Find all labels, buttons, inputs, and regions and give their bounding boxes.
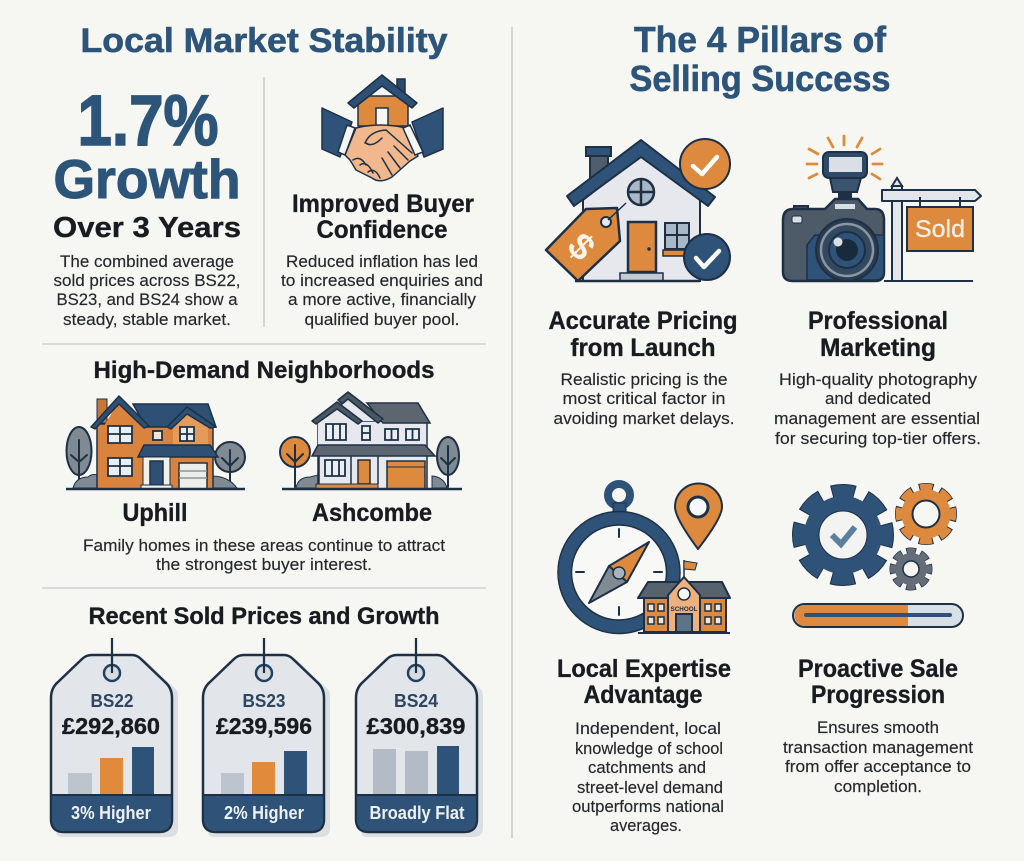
- text: combined average description: steady, stable market.: [63, 310, 231, 329]
- heading: Accurate Pricing from Launch: from Launch: [570, 334, 716, 362]
- text: high-quality photography description: management are essential: [774, 409, 980, 428]
- price tag: BS22: 3% Higher: [71, 803, 151, 823]
- panel: high-demand neighborhoods: [66, 357, 462, 574]
- text: independent local knowledge description: catchments and: [588, 758, 706, 777]
- text: independent local knowledge description: outperforms national: [572, 797, 724, 816]
- heading: High-Demand Neighborhoods: High-Demand Neighborhoods: [94, 357, 434, 384]
- icon: camera with flash and sold sign: [783, 136, 981, 281]
- price tag: BS23: BS23: [242, 691, 286, 711]
- heading: Local Expertise Advantage: Advantage: [584, 681, 703, 709]
- heading: Local Market Stability: Local Market Stability: [80, 22, 448, 60]
- heading: Proactive Sale Progression: [798, 655, 958, 709]
- heading: Improved Buyer Confidence: Confidence: [316, 216, 448, 244]
- heading: Improved Buyer Confidence: Improved Buyer: [292, 190, 474, 218]
- panel: the 4 pillars of selling success: [546, 19, 981, 835]
- price tag: BS24: BS24: [394, 691, 438, 711]
- text: ensures smooth transaction description: [783, 718, 973, 796]
- text: reduced inflation description: Reduced inflation has led: [286, 252, 478, 271]
- text: independent local knowledge description: knowledge of school: [575, 739, 723, 758]
- text: realistic pricing description: Realistic pricing is the: [560, 370, 728, 389]
- stat: 1.7% growth over 3 years: Over 3 Years: [53, 212, 241, 244]
- text: ensures smooth transaction description: transaction management: [783, 738, 973, 757]
- heading: Improved Buyer Confidence: [292, 190, 474, 244]
- text: combined average description: sold prices across BS22,: [54, 271, 240, 290]
- icon: camera with flash and sold sign: Sold: [915, 216, 965, 243]
- price tag: BS24: Broadly Flat: [370, 803, 464, 823]
- text: independent local knowledge description: Independent, local: [575, 719, 721, 738]
- text: reduced inflation description: to increased enquiries and: [281, 271, 483, 290]
- heading: The 4 Pillars of Selling Success: Selling Success: [630, 58, 890, 99]
- text: realistic pricing description: most critical factor in: [562, 389, 726, 408]
- text: family homes description: the strongest buyer interest.: [156, 555, 372, 574]
- icon: gears and progress bar: [793, 488, 963, 627]
- icon: Ashcombe white house: [280, 392, 462, 489]
- label: Uphill: Uphill: [122, 499, 188, 527]
- stat: 1.7% growth over 3 years: [53, 82, 241, 244]
- label: Ashcombe: Ashcombe: [312, 499, 432, 527]
- price tag: BS23: [203, 638, 330, 837]
- text: realistic pricing description: avoiding market delays.: [554, 409, 734, 428]
- icon: compass with pin and school: [558, 483, 730, 634]
- icon: Uphill orange house: [66, 396, 245, 489]
- price tag: BS24: [356, 638, 483, 837]
- heading: Professional Marketing: [808, 307, 948, 362]
- text: reduced inflation description: [281, 252, 483, 329]
- text: high-quality photography description: and dedicated: [825, 389, 931, 408]
- heading: Local Expertise Advantage: [557, 655, 731, 709]
- heading: The 4 Pillars of Selling Success: The 4 Pillars of: [634, 19, 887, 60]
- text: combined average description: BS23, and BS24 show a: [56, 290, 238, 309]
- heading: Professional Marketing: Marketing: [820, 334, 936, 362]
- price tag: BS23: 2% Higher: [224, 803, 304, 823]
- heading: Local Expertise Advantage: Local Expertise: [557, 655, 731, 683]
- text: reduced inflation description: qualified buyer pool.: [304, 310, 460, 329]
- heading: The 4 Pillars of Selling Success: [630, 19, 890, 99]
- icon: house with price tag and checks: [546, 139, 730, 281]
- text: combined average description: [54, 252, 240, 329]
- heading: Recent Sold Prices and Growth: Recent Sold Prices and Growth: [88, 603, 440, 630]
- heading: Accurate Pricing from Launch: [548, 307, 738, 362]
- glyph: dollar sign on tag: $: [560, 225, 603, 269]
- text: high-quality photography description: High-quality photography: [779, 370, 978, 389]
- text: ensures smooth transaction description: from offer acceptance to: [785, 757, 971, 776]
- text: reduced inflation description: a more active, financially: [288, 290, 477, 309]
- price tag: BS23: £239,596: [216, 713, 312, 739]
- text: independent local knowledge description: averages.: [610, 816, 682, 835]
- text: high-quality photography description: [774, 370, 981, 448]
- price tag: BS24: £300,839: [366, 713, 466, 739]
- panel: recent sold prices and growth: [51, 603, 483, 837]
- heading: Proactive Sale Progression: Proactive Sale: [798, 655, 958, 683]
- text: ensures smooth transaction description: completion.: [834, 777, 922, 796]
- text: realistic pricing description: [554, 370, 734, 428]
- price tag: BS22: BS22: [90, 691, 134, 711]
- price tag: BS22: £292,860: [62, 713, 160, 739]
- text: family homes description: Family homes in these areas continue to attract: [83, 536, 445, 555]
- text: combined average description: The combined average: [60, 252, 234, 271]
- heading: Accurate Pricing from Launch: Accurate Pricing: [548, 307, 738, 335]
- stat: 1.7% growth over 3 years: Growth: [54, 148, 240, 210]
- text: ensures smooth transaction description: Ensures smooth: [817, 718, 939, 737]
- panel: local market stability: [53, 22, 483, 329]
- icon: compass with pin and school: SCHOOL: [670, 607, 698, 613]
- heading: Professional Marketing: Professional: [808, 307, 948, 335]
- stat: 1.7% growth over 3 years: 1.7%: [78, 82, 218, 161]
- text: family homes description: [83, 536, 445, 574]
- text: independent local knowledge description: [572, 719, 724, 835]
- text: high-quality photography description: for securing top-tier offers.: [775, 429, 981, 448]
- price tag: BS22: [51, 638, 178, 837]
- icon: house above handshake: [322, 75, 443, 181]
- text: independent local knowledge description: street-level demand: [577, 778, 723, 797]
- heading: Proactive Sale Progression: Progression: [811, 681, 945, 709]
